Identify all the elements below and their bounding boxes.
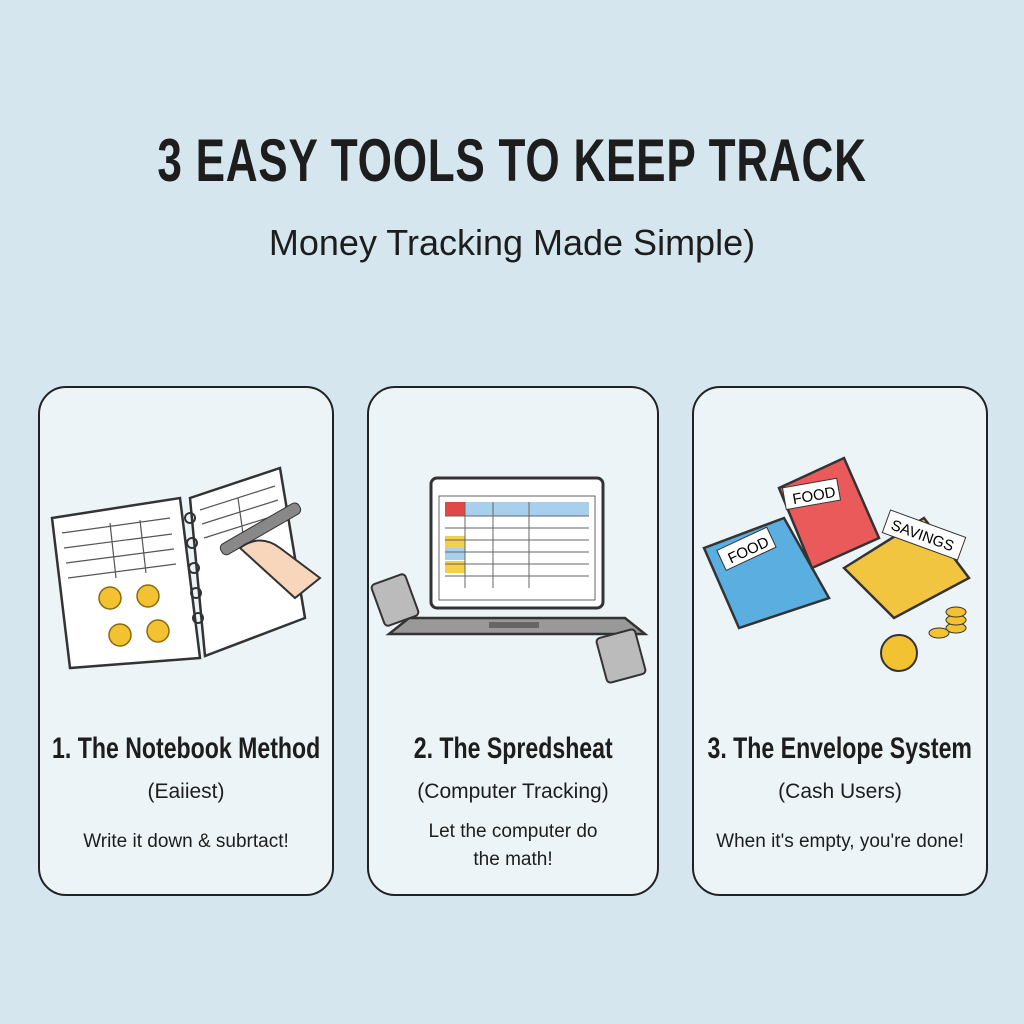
description: the math! (473, 849, 553, 870)
title: 3 EASY TOOLS TO KEEP TRACK (157, 127, 867, 194)
heading: 2. The Spredsheat (413, 732, 612, 765)
subtitle: Money Tracking Made Simple) (269, 222, 755, 263)
icon: laptop (370, 476, 648, 684)
description: When it's empty, you're done! (716, 831, 964, 852)
icon: envelopes: SAVINGS (889, 517, 956, 555)
panel: notebook (38, 386, 334, 896)
panel: spreadsheet (367, 386, 659, 896)
heading: 3. The Envelope System (708, 732, 972, 765)
description: Write it down & subrtact! (83, 831, 289, 852)
heading: 1. The Notebook Method (52, 732, 320, 765)
icon: envelopes: FOOD (725, 534, 772, 567)
subheading: (Eaiiest) (147, 780, 225, 803)
description: Let the computer do (428, 821, 598, 842)
icon: envelopes: FOOD (791, 484, 837, 508)
icon: notebook (50, 466, 322, 670)
subheading: (Computer Tracking) (417, 780, 609, 803)
icon: envelopes (702, 456, 971, 672)
panel: envelope (692, 386, 988, 896)
subheading: (Cash Users) (778, 780, 902, 803)
description (428, 821, 598, 870)
